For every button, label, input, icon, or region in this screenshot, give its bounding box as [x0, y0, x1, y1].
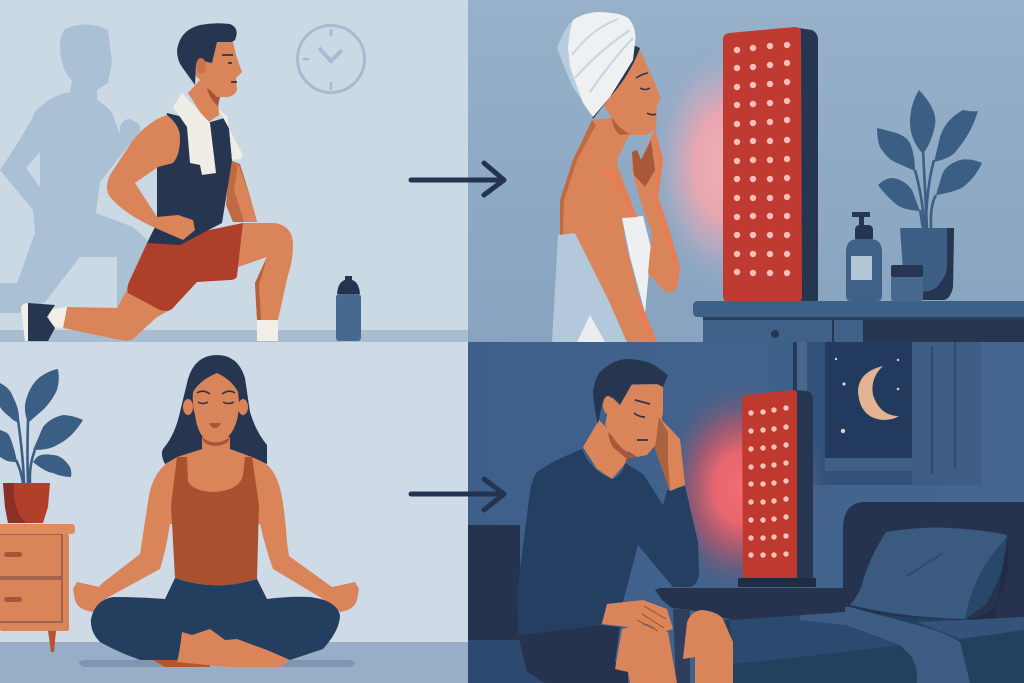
figure: man lunging with towel	[21, 23, 293, 341]
hand on knee	[602, 600, 673, 632]
neck shadow	[202, 437, 230, 446]
dresser	[693, 301, 1024, 342]
ear	[196, 58, 206, 74]
arrow: top	[411, 163, 504, 195]
mattress	[720, 612, 1024, 683]
back arm	[226, 160, 257, 222]
panel: red light device top	[723, 27, 818, 302]
figure: meditating woman	[73, 355, 359, 667]
panel: bottom right background	[468, 342, 1024, 683]
ear	[603, 396, 613, 414]
light glow bottom	[657, 376, 827, 600]
towel wrap	[568, 12, 635, 117]
window with moon	[767, 342, 981, 485]
arrow: bottom	[411, 479, 504, 510]
hand on temple	[655, 417, 685, 491]
figure: man with hand on temple	[517, 359, 733, 683]
panel: top right background	[468, 0, 1024, 342]
tank top	[147, 113, 232, 245]
icon: pump bottle	[846, 212, 882, 301]
shorts	[127, 223, 243, 311]
panel: top left background	[0, 0, 468, 342]
panel: bottom left background	[0, 342, 468, 683]
back leg	[63, 288, 170, 341]
sweater	[517, 449, 699, 635]
panel: red light device bottom	[738, 390, 816, 587]
body	[560, 118, 657, 342]
floor mat shadow	[79, 660, 355, 667]
hair band	[592, 45, 640, 119]
pot	[900, 228, 954, 300]
hand and forearm	[632, 128, 680, 292]
neck	[188, 80, 219, 123]
front leg	[238, 223, 293, 320]
left arm	[107, 115, 195, 240]
towel wrap back	[557, 17, 600, 117]
hair tips	[163, 438, 267, 464]
feet	[153, 660, 210, 667]
table under device	[655, 588, 845, 620]
light glow top	[650, 40, 800, 290]
knee right	[683, 610, 733, 683]
face	[195, 42, 242, 97]
moon	[858, 366, 899, 420]
knee left	[615, 624, 677, 683]
face	[605, 384, 663, 457]
shadow silhouette of runner	[0, 24, 147, 313]
icon: sock back	[47, 307, 67, 328]
hands	[73, 582, 105, 612]
shorts	[518, 625, 628, 683]
nightstand	[0, 524, 75, 652]
towel	[173, 93, 243, 175]
body towel right	[622, 216, 651, 313]
face	[600, 50, 661, 135]
body towel left	[552, 233, 627, 342]
stars	[835, 358, 899, 433]
icon: wall clock	[298, 26, 364, 92]
hair	[162, 355, 267, 464]
tank top	[171, 457, 259, 585]
pillow	[850, 528, 1007, 619]
sock front	[257, 320, 278, 341]
arms and chest	[93, 437, 340, 612]
hair	[593, 359, 668, 424]
neck	[583, 420, 628, 479]
icon: shoe	[21, 303, 55, 341]
face	[193, 373, 239, 441]
hair	[177, 23, 237, 85]
icon: water bottle	[336, 276, 361, 341]
headboard	[843, 502, 1024, 640]
bed	[468, 502, 1024, 683]
figure: woman with towel	[552, 12, 680, 342]
icon: potted plant	[877, 90, 982, 300]
icon: small jar	[891, 265, 923, 301]
ears	[183, 399, 248, 415]
icon: potted plant on nightstand	[0, 369, 83, 523]
blanket throw	[800, 605, 970, 683]
pot	[3, 483, 50, 523]
legs	[91, 578, 340, 664]
